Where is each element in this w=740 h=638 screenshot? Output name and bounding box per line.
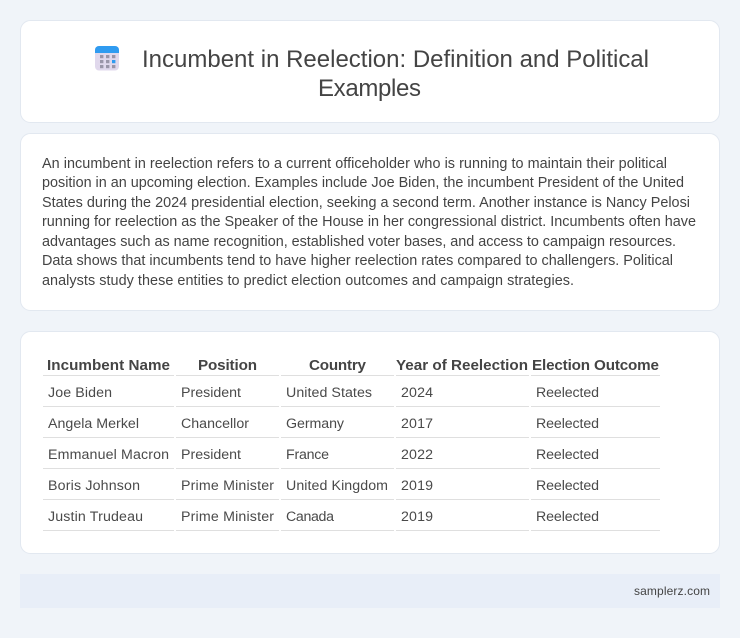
row: Boris Johnson: United Kingdom bbox=[286, 478, 388, 494]
row: Boris Johnson: Reelected bbox=[536, 478, 599, 494]
row: Joe Biden: 2024 bbox=[401, 385, 433, 401]
table header: Year of Reelection bbox=[396, 357, 528, 374]
description text: States during the 2024 presidential election, seeking a second term. Another instance is Nancy Pelosi bbox=[42, 195, 690, 211]
row: Justin Trudeau: Justin Trudeau bbox=[48, 509, 143, 525]
description text: running for reelection as the Speaker of the House in her congressional district. Incumbents often have bbox=[42, 214, 696, 230]
row: Joe Biden: Joe Biden bbox=[48, 385, 112, 401]
row: Boris Johnson: Prime Minister bbox=[181, 478, 274, 494]
row: Angela Merkel: Angela Merkel bbox=[48, 416, 139, 432]
row: Angela Merkel: Chancellor bbox=[181, 416, 249, 432]
row: Emmanuel Macron bbox=[48, 447, 599, 463]
row: Justin Trudeau: Reelected bbox=[536, 509, 599, 525]
row: Joe Biden: President bbox=[181, 385, 241, 401]
table header: Election Outcome bbox=[532, 357, 659, 374]
description text: Data shows that incumbents tend to have higher reelection rates compared to challengers. Political bbox=[42, 253, 673, 269]
row: Emmanuel Macron: France bbox=[286, 447, 329, 463]
table rules bbox=[43, 375, 660, 531]
panel: title bbox=[20, 20, 720, 122]
footer: samplerz.com bbox=[634, 584, 710, 598]
row: Justin Trudeau bbox=[48, 509, 599, 525]
title: Examples bbox=[318, 75, 421, 102]
description text: An incumbent in reelection refers to a current officeholder who is running to maintain their political bbox=[42, 156, 667, 172]
title: Incumbent in Reelection: Definition and Political bbox=[142, 46, 649, 73]
table header: Incumbent Name bbox=[47, 357, 170, 374]
row: Justin Trudeau: Canada bbox=[286, 509, 334, 525]
description text: advantages such as name recognition, established voter bases, and access to campaign resources. bbox=[42, 234, 676, 250]
description text: position in an upcoming election. Examples include Joe Biden, the incumbent President of the United bbox=[42, 175, 684, 191]
row: Angela Merkel: Reelected bbox=[536, 416, 599, 432]
row: Joe Biden: Reelected bbox=[536, 385, 599, 401]
footer bbox=[20, 574, 720, 608]
icon: calendar bbox=[95, 46, 119, 70]
panel: table bbox=[20, 332, 720, 554]
row: Angela Merkel: 2017 bbox=[401, 416, 433, 432]
table header: Position bbox=[198, 357, 257, 374]
title bbox=[142, 46, 649, 102]
row: Joe Biden: United States bbox=[286, 385, 372, 401]
row: Angela Merkel: Germany bbox=[286, 416, 345, 432]
description text bbox=[42, 156, 696, 289]
row: Boris Johnson bbox=[48, 478, 599, 494]
row: Emmanuel Macron: President bbox=[181, 447, 241, 463]
row: Emmanuel Macron: Reelected bbox=[536, 447, 599, 463]
row: Angela Merkel bbox=[48, 416, 599, 432]
row: Emmanuel Macron: 2022 bbox=[401, 447, 433, 463]
row: Boris Johnson: Boris Johnson bbox=[48, 478, 140, 494]
row: Emmanuel Macron: Emmanuel Macron bbox=[48, 447, 169, 463]
table header: Country bbox=[309, 357, 367, 374]
description text: analysts study these entities to predict election outcomes and campaign strategies. bbox=[42, 273, 574, 289]
row: Justin Trudeau: Prime Minister bbox=[181, 509, 274, 525]
row: Boris Johnson: 2019 bbox=[401, 478, 433, 494]
table header bbox=[47, 357, 659, 374]
row: Joe Biden bbox=[48, 385, 599, 401]
panel: description bbox=[20, 134, 720, 310]
row: Justin Trudeau: 2019 bbox=[401, 509, 433, 525]
